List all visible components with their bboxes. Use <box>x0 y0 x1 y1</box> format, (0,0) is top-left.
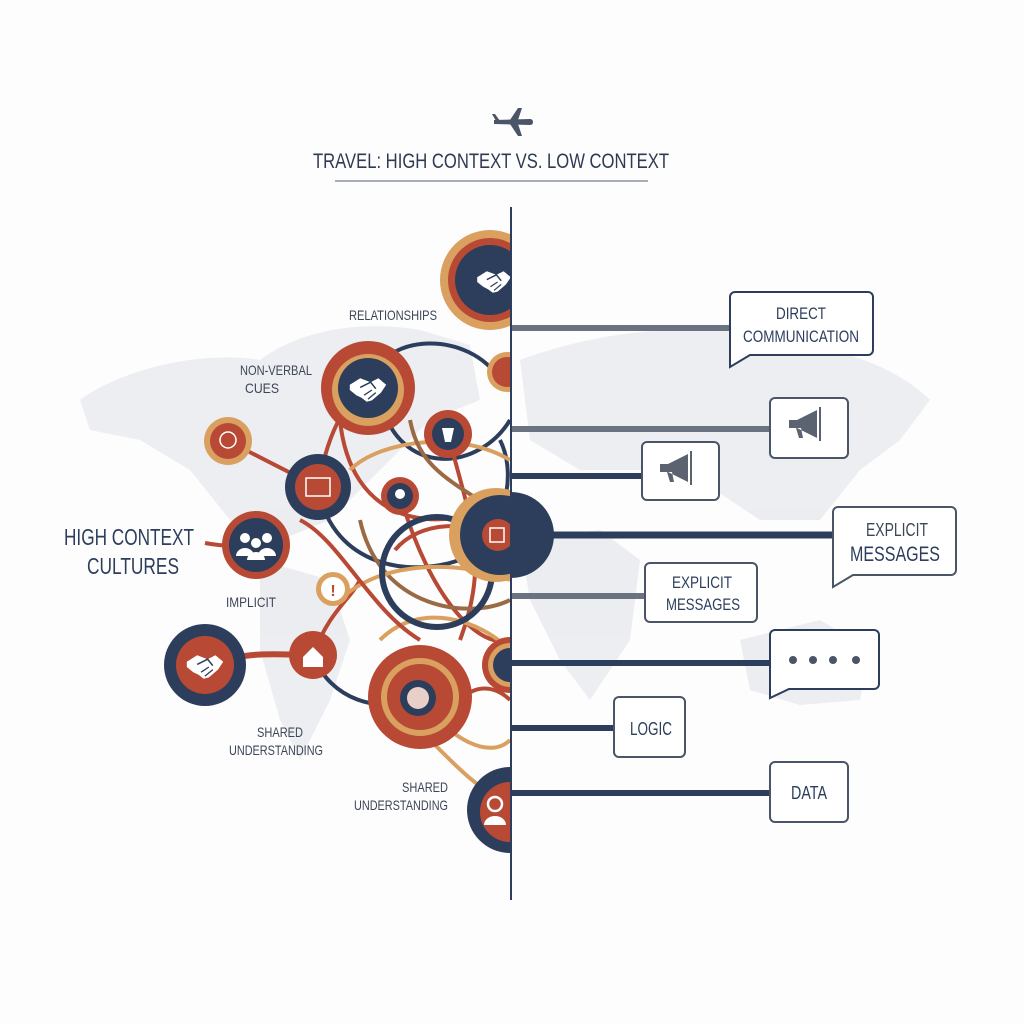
world map background <box>80 326 930 760</box>
node: center large <box>449 488 510 582</box>
title: TRAVEL: HIGH CONTEXT VS. LOW CONTEXT <box>313 150 669 173</box>
label: shared understanding 1: SHARED <box>257 724 303 740</box>
panel: high context network <box>164 230 554 853</box>
box: direct communication: DIRECT <box>776 304 826 323</box>
labels: high context: CUES <box>245 380 279 396</box>
panel: low context connectors <box>512 328 834 793</box>
heading: high context cultures <box>64 524 194 579</box>
box: explicit messages small: EXPLICIT <box>672 573 732 592</box>
connecting curves <box>205 343 510 793</box>
node: handshake bottom-left <box>164 624 246 706</box>
icon: airplane <box>492 108 533 136</box>
box: megaphone 1 <box>770 398 848 458</box>
box: ellipsis speech bubble <box>770 630 879 698</box>
label: non-verbal cues: NON-VERBAL <box>240 362 312 378</box>
box: logic <box>614 697 685 757</box>
box: direct communication: COMMUNICATION <box>743 327 859 346</box>
centre node extending right of divider <box>511 492 554 578</box>
box: explicit messages small <box>645 563 757 622</box>
box: explicit messages large: EXPLICIT <box>866 520 928 540</box>
divider line <box>510 207 512 900</box>
labels: high context <box>226 307 448 813</box>
node: right small <box>487 352 510 392</box>
node: house <box>289 631 337 679</box>
node: ornament <box>285 454 351 520</box>
node: target <box>368 645 472 749</box>
labels: high context: UNDERSTANDING <box>354 797 448 813</box>
box: explicit messages small: MESSAGES <box>666 595 740 614</box>
box: explicit messages large <box>833 507 956 587</box>
node: handshake relationships <box>321 341 415 435</box>
node: bull <box>424 410 472 458</box>
node: top handshake <box>440 230 510 330</box>
box: logic: LOGIC <box>630 719 672 739</box>
node: right mid small <box>482 637 510 693</box>
box: megaphone 2 <box>642 442 719 500</box>
heading: high context cultures: CULTURES <box>87 553 179 579</box>
label: relationships: RELATIONSHIPS <box>349 307 437 323</box>
label: shared understanding 2: SHARED <box>402 779 448 795</box>
node: exclamation <box>316 572 350 606</box>
node: bottom person <box>467 767 510 853</box>
box: data <box>770 762 848 822</box>
node: thought <box>204 417 252 465</box>
node: small figure <box>381 477 419 515</box>
label: implicit: IMPLICIT <box>226 594 276 610</box>
box: explicit messages large: MESSAGES <box>850 543 940 566</box>
box: data: DATA <box>791 783 827 803</box>
node: exclamation: ! <box>330 583 336 600</box>
node: people <box>222 511 290 579</box>
box: direct communication <box>730 292 873 367</box>
heading: high context cultures: HIGH CONTEXT <box>64 524 194 550</box>
labels: high context: UNDERSTANDING <box>229 742 323 758</box>
